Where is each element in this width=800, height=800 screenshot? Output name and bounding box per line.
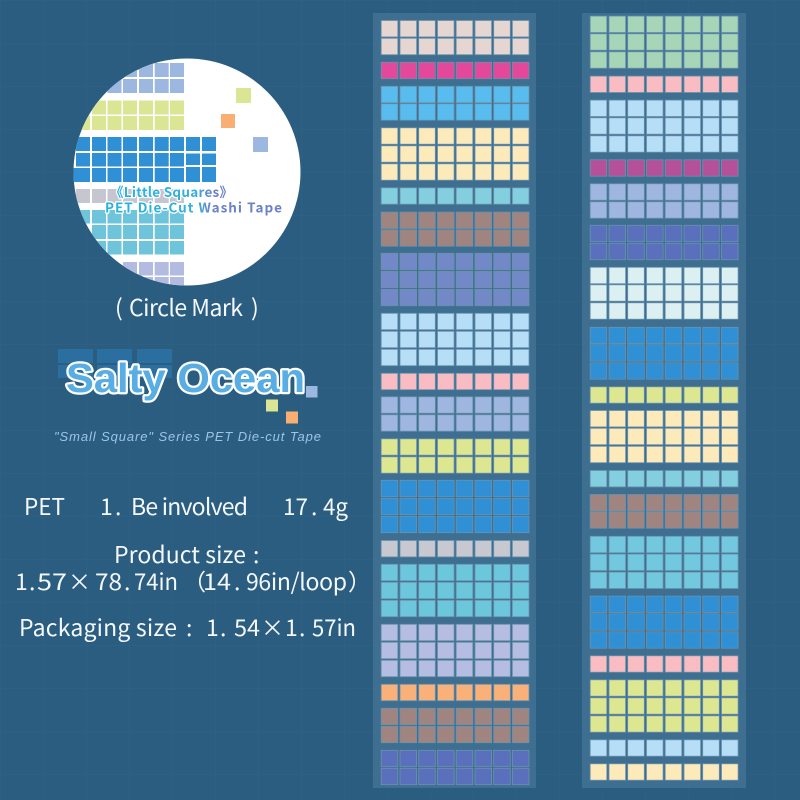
circle caption: PET Die-Cut Washi Tape bbox=[105, 196, 282, 216]
quantity: . bbox=[115, 488, 121, 522]
row: brown bbox=[590, 494, 738, 528]
packaging size value: 1 bbox=[285, 609, 298, 643]
row: teal bbox=[381, 564, 529, 617]
row: light blue single bbox=[590, 740, 738, 756]
row: mint bbox=[590, 16, 738, 68]
row: indigo bbox=[590, 225, 738, 260]
row: plum bbox=[590, 160, 738, 176]
product size value: . bbox=[124, 563, 130, 597]
packaging size value bbox=[206, 609, 356, 643]
row: blush bbox=[381, 20, 529, 55]
row: blue lower bbox=[590, 596, 738, 648]
product size value: . bbox=[29, 563, 35, 597]
row: powder blue bbox=[590, 184, 738, 218]
logo title: Salty Ocean bbox=[66, 355, 305, 401]
circle caption: 《Little Squares》 bbox=[110, 181, 233, 201]
row: light blue bbox=[590, 100, 738, 152]
product size heading: Product size bbox=[114, 536, 246, 570]
row: pale ice bbox=[590, 267, 738, 319]
product size value: 78 bbox=[95, 563, 122, 597]
panel: right tape strip bbox=[582, 13, 746, 788]
row: powder blue bbox=[381, 397, 529, 431]
product size value: 14 bbox=[203, 563, 231, 597]
logo background squares bbox=[58, 349, 172, 378]
product size value: 96in/loop bbox=[246, 563, 347, 597]
weight: . bbox=[311, 488, 317, 522]
row: teal bbox=[590, 536, 738, 588]
product size value: . bbox=[234, 563, 240, 597]
row: indigo bbox=[381, 750, 529, 785]
row: cream single bbox=[590, 764, 738, 780]
weight: 17 bbox=[283, 488, 308, 522]
packaging size value: 54 bbox=[234, 609, 260, 643]
specifications bbox=[15, 488, 371, 643]
packaging size: : bbox=[186, 609, 192, 643]
row: lime bbox=[590, 387, 738, 403]
packaging size value: × bbox=[261, 609, 284, 643]
packaging size value: . bbox=[220, 609, 226, 643]
circle mark label: ) bbox=[251, 289, 259, 323]
product size heading: : bbox=[253, 536, 259, 570]
row: pink bbox=[590, 76, 738, 92]
product size value: 57 bbox=[37, 563, 67, 597]
product size value: （ bbox=[183, 563, 206, 597]
subtitle: "Small Square" Series PET Die-cut Tape bbox=[54, 429, 321, 444]
row: aqua bbox=[590, 470, 738, 487]
material: PET bbox=[24, 488, 65, 522]
row: grey bbox=[381, 540, 529, 557]
row: cream bbox=[590, 410, 738, 463]
packaging size value: 57in bbox=[312, 609, 356, 643]
row: blue bbox=[381, 480, 529, 533]
row: aqua bbox=[381, 188, 529, 204]
row: sky blue bbox=[381, 86, 529, 120]
row: cream bbox=[381, 128, 529, 180]
row: magenta bbox=[381, 62, 529, 79]
quantity: 1 bbox=[100, 488, 113, 522]
circle caption bbox=[105, 181, 282, 216]
product size value: 74in bbox=[134, 563, 178, 597]
row: lime bbox=[381, 439, 529, 473]
row: pink lower bbox=[590, 656, 738, 672]
row: periwinkle bbox=[381, 253, 529, 306]
circle mark label: ( bbox=[115, 289, 123, 323]
tape squares in circle bbox=[74, 63, 216, 286]
circle mark sample bbox=[60, 58, 300, 291]
logo accent squares bbox=[266, 386, 318, 424]
packaging size value: . bbox=[299, 609, 305, 643]
packaging size value: 1 bbox=[206, 609, 219, 643]
row: blue bbox=[590, 327, 738, 379]
product size value: 1 bbox=[15, 563, 28, 597]
row: light blue bbox=[381, 313, 529, 366]
product size value: × bbox=[68, 563, 91, 597]
row: brown bbox=[381, 212, 529, 246]
weight bbox=[283, 488, 348, 522]
row: lavender bbox=[381, 624, 529, 677]
loose squares in circle bbox=[221, 88, 268, 152]
row: pink bbox=[381, 373, 529, 390]
row: brown lower bbox=[381, 708, 529, 743]
row: lime lower bbox=[590, 680, 738, 732]
row: orange bbox=[381, 684, 529, 701]
product size value bbox=[15, 563, 371, 597]
product size value: ） bbox=[348, 563, 371, 597]
circle mark label: Circle Mark bbox=[129, 289, 243, 323]
weight: 4g bbox=[323, 488, 348, 522]
panel: left tape strip bbox=[373, 13, 536, 788]
quantity: Be involved bbox=[131, 488, 248, 522]
logo: Salty Ocean bbox=[58, 349, 318, 424]
packaging size: Packaging size bbox=[19, 609, 177, 643]
